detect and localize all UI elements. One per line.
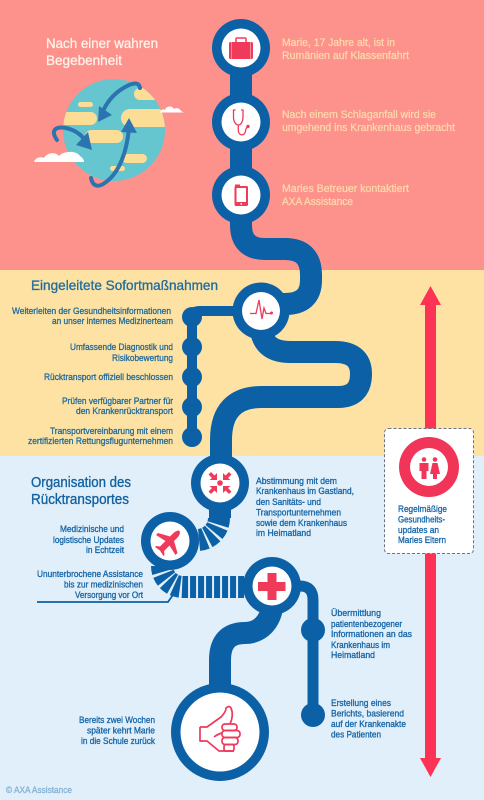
- icon: medical cross: [243, 557, 301, 615]
- text: uninterrupted assistance: bis zur medizinischen: [64, 580, 143, 590]
- text: uninterrupted assistance: [37, 569, 143, 601]
- heading: Eingeleitete Sofortmaßnahmen: Eingeleitete Sofortmaßnahmen: [31, 277, 218, 293]
- path: main journey route: [220, 48, 361, 732]
- panel: story start background: [0, 0, 484, 270]
- text: coordination with hospitals: [256, 476, 354, 539]
- text: measures list: [12, 306, 173, 447]
- text: supervisor contacts AXA: AXA Assistance: [282, 196, 353, 208]
- text: updates label: Maries Eltern: [398, 535, 446, 546]
- heading: Organisation des Rücktransportes: Rücktransportes: [31, 492, 129, 508]
- text: supervisor contacts AXA: Maries Betreuer kontaktiert: [282, 183, 409, 195]
- text: measures list: zertifizierten Rettungsflugunternehmen: [28, 436, 173, 447]
- arrow: parent updates timeline: [420, 286, 441, 777]
- text: Marie on class trip: Rumänien auf Klassenfahrt: [282, 50, 409, 62]
- text: measures list: Prüfen verfügbarer Partner für: [62, 396, 173, 407]
- text: updates label: [398, 504, 447, 546]
- text: coordination with hospitals: sowie dem Krankenhaus: [256, 518, 347, 529]
- title: Nach einer wahren Begebenheit: Begebenheit: [46, 52, 122, 68]
- text: back at school: später kehrt Marie: [87, 726, 155, 736]
- text: uninterrupted assistance: Ununterbrochene Assistance: [37, 569, 143, 580]
- title: Nach einer wahren Begebenheit: Nach einer wahren: [46, 35, 158, 51]
- text: patient information transfer: Krankenhaus im: [331, 640, 390, 651]
- text: patient information transfer: patientenbezogener: [331, 619, 402, 630]
- heading: Organisation des Rücktransportes: [31, 475, 131, 508]
- text: measures list: Rücktransport offiziell beschlossen: [44, 372, 173, 383]
- icon: thumbs up: [171, 683, 269, 781]
- icon: stethoscope: [212, 93, 270, 151]
- text: measures list: Umfassende Diagnostik und: [70, 342, 173, 353]
- text: patient information transfer: Informationen an das: [331, 629, 412, 640]
- callout: regular updates to parents: [384, 428, 474, 554]
- text: real-time updates: [53, 524, 124, 556]
- text: real-time updates: logistische Updates: [53, 535, 124, 546]
- text: updates label: Gesundheits-: [398, 514, 445, 526]
- text: supervisor contacts AXA: [282, 183, 409, 208]
- text: updates label: Regelmäßige: [398, 504, 447, 515]
- icon: heartbeat: [232, 282, 290, 340]
- text: stroke and hospital: umgehend ins Krankenhaus gebracht: [282, 122, 455, 134]
- text: back at school: Bereits zwei Wochen: [79, 715, 155, 726]
- text: real-time updates: in Echtzeit: [86, 545, 124, 556]
- text: report creation: Berichts, basierend: [331, 708, 404, 720]
- heading: Organisation des Rücktransportes: Organisation des: [31, 475, 131, 491]
- text: report creation: des Patienten: [331, 730, 381, 740]
- text: updates label: updates an: [398, 525, 439, 536]
- path: striped connector to medical cross: [162, 566, 245, 587]
- text: patient information transfer: Übermittlung: [331, 608, 381, 619]
- text: back at school: [79, 715, 155, 747]
- panel: immediate measures background: [0, 270, 484, 456]
- footer: copyright: © AXA Assistance: [6, 785, 72, 796]
- text: Marie on class trip: [282, 37, 409, 62]
- text: measures list: Weiterleiten der Gesundheitsinformationen: [12, 306, 171, 317]
- text: coordination with hospitals: im Heimatland: [256, 528, 311, 539]
- icon: airplane: [141, 512, 199, 570]
- title: Nach einer wahren Begebenheit: [46, 35, 158, 68]
- icon: parents: [399, 437, 459, 497]
- text: patient information transfer: Heimatland: [331, 650, 375, 661]
- text: coordination with hospitals: den Sanitäts- und: [256, 497, 321, 508]
- text: back at school: in die Schule zurück: [81, 736, 155, 747]
- text: measures list: den Krankenrücktransport: [76, 406, 173, 417]
- panel: transport organisation background: [0, 456, 484, 800]
- text: coordination with hospitals: Krankenhaus im Gastland,: [256, 486, 354, 497]
- text: measures list: Transportvereinbarung mit einem: [50, 426, 173, 437]
- path: measures branch with dots: [182, 307, 240, 447]
- pointer line under assistance text: [37, 592, 175, 602]
- text: report creation: auf der Krankenakte: [331, 719, 406, 730]
- text: report creation: Erstellung eines: [331, 698, 391, 709]
- text: uninterrupted assistance: Versorgung vor Ort: [75, 590, 143, 601]
- text: patient information transfer: [331, 608, 412, 661]
- text: stroke and hospital: Nach einem Schlaganfall wird sie: [282, 109, 436, 121]
- path: striped connector to plane: [197, 518, 219, 540]
- text: real-time updates: Medizinische und: [60, 524, 124, 535]
- text: report creation: [331, 698, 406, 740]
- icon: converging arrows: [191, 454, 249, 512]
- text: measures list: Risikobewertung: [112, 353, 173, 364]
- text: stroke and hospital: [282, 109, 455, 134]
- icon: globe with arrows and clouds: [34, 79, 184, 186]
- icon: suitcase: [212, 19, 270, 77]
- text: measures list: an unser internes Medizinerteam: [52, 316, 173, 327]
- icon: smartphone: [212, 166, 270, 224]
- text: coordination with hospitals: Abstimmung mit dem: [256, 476, 337, 487]
- path: reporting branch with dots: [295, 586, 325, 727]
- text: Marie on class trip: Marie, 17 Jahre alt, ist in: [282, 37, 395, 49]
- text: coordination with hospitals: Transportunternehmen: [256, 508, 341, 518]
